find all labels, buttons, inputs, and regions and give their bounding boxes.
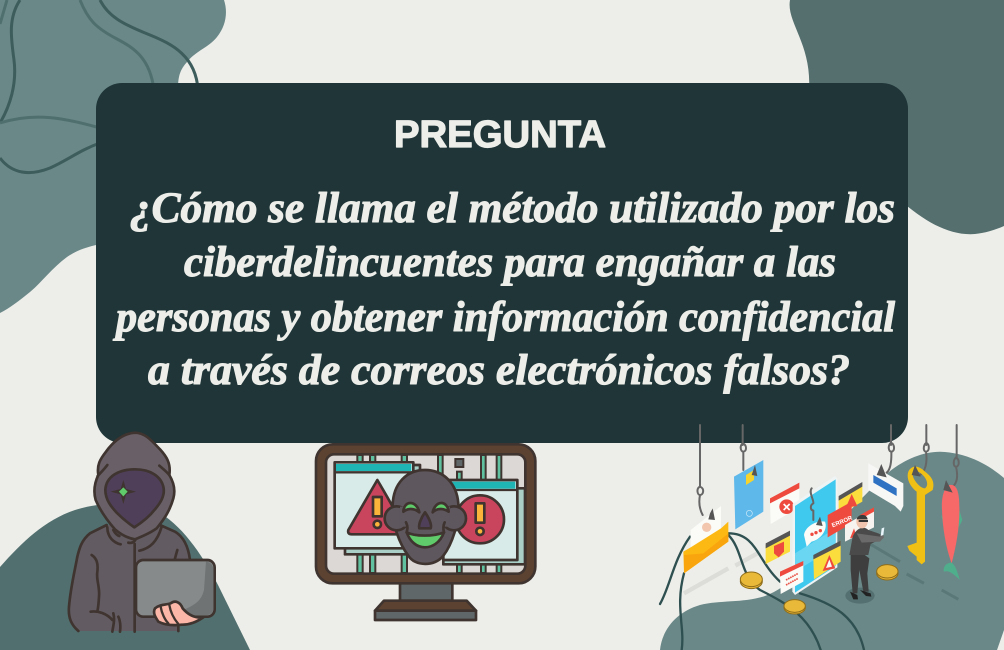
question text: a través de correos electrónicos falsos? [148, 347, 850, 394]
blob: top right [790, 0, 1004, 234]
question text: personas y obtener información confidencial [112, 294, 895, 341]
warning window left [335, 462, 420, 554]
coins [740, 565, 898, 614]
envelope with document [683, 506, 728, 573]
blob: bottom right [660, 452, 1004, 650]
ground shadows [684, 544, 958, 599]
heading: PREGUNTA [394, 114, 606, 156]
credit card [734, 460, 763, 529]
monitor stand [375, 582, 476, 620]
hook: fish [953, 425, 959, 487]
hook: key [920, 425, 929, 475]
smartphone [792, 476, 837, 595]
warning window right [443, 480, 525, 564]
monitor frame [316, 444, 535, 583]
golden key [907, 465, 933, 564]
alert card: error message [828, 502, 854, 537]
alert card: red cross [770, 483, 799, 524]
question text: ciberdelincuentes para engañar a las [184, 239, 836, 286]
icon: phishing illustration [660, 425, 962, 650]
icon: monitor with skull and warnings [316, 444, 535, 620]
alert card: warning top [839, 482, 862, 515]
hacker figure [845, 515, 884, 604]
blob: top left [0, 0, 226, 313]
skull [385, 470, 466, 564]
circuit stripes [357, 455, 501, 573]
message bubble [868, 463, 903, 512]
hook: credit card [741, 425, 746, 470]
alert note [780, 561, 803, 594]
alert card: error message: ERROR [831, 515, 854, 529]
icon: hooded hacker with laptop [69, 433, 215, 632]
question panel [96, 83, 908, 443]
hook: message [887, 425, 894, 473]
alert card: shield [766, 531, 790, 564]
monitor screen [326, 454, 525, 574]
blob: bottom left [0, 504, 250, 650]
alert card: red window [845, 507, 874, 542]
question text: ¿Cómo se llama el método utilizado por los [130, 185, 895, 232]
hook: envelope [697, 425, 703, 515]
red fish [941, 480, 962, 580]
question text [112, 185, 895, 394]
cables [660, 533, 864, 650]
alert card: large warning [813, 541, 841, 579]
